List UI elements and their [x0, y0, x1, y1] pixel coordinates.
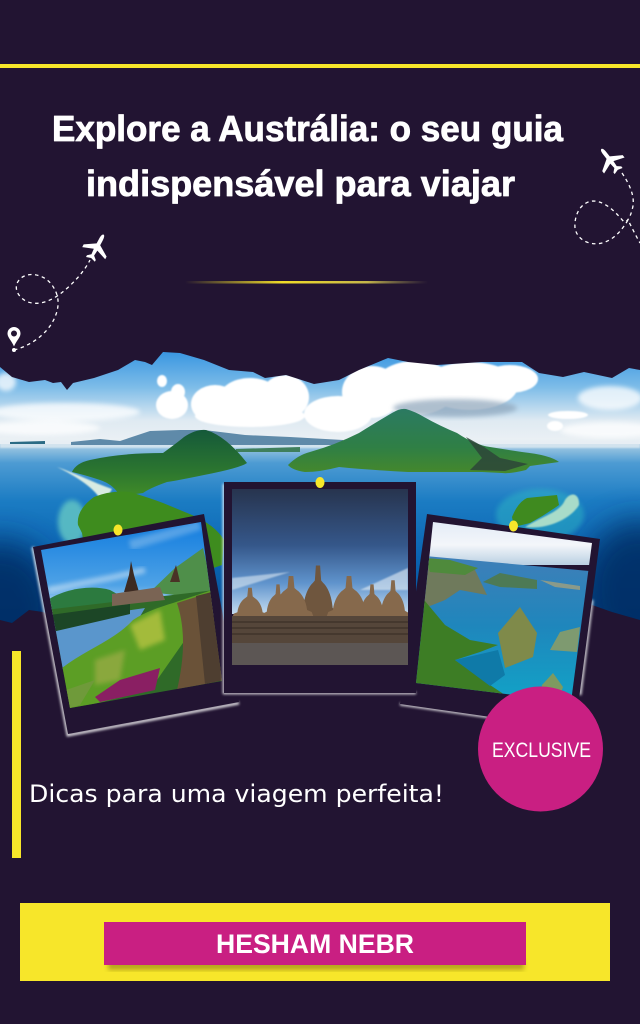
yellow box: [20, 903, 610, 981]
small gold divider: [185, 281, 428, 284]
torn dark edge top: [0, 340, 640, 390]
author banner: [20, 903, 610, 981]
left island: [72, 430, 247, 494]
frame: [33, 514, 239, 734]
frame: [400, 514, 600, 729]
badge: exclusive: EXCLUSIVE: [492, 739, 591, 762]
frame glow: [224, 484, 416, 693]
ground: [232, 643, 408, 665]
flowers: [95, 668, 160, 702]
author name: HESHAM NEBR: [216, 929, 414, 959]
left cliff: [415, 595, 505, 695]
clouds: [156, 361, 588, 432]
flight path left with plane and pin: [8, 229, 115, 352]
title: indispensável para viajar: [86, 163, 515, 204]
title: [52, 108, 564, 204]
polaroid right: [400, 514, 600, 729]
frame glow: [400, 600, 592, 717]
sky: [0, 352, 640, 444]
distant mountains: [71, 430, 343, 445]
bank plants: [62, 590, 212, 710]
stupas: [232, 566, 410, 618]
lagoon: [455, 650, 505, 686]
lower rock: [542, 673, 563, 690]
magenta bar: [104, 922, 526, 965]
flight path right with plane: [575, 141, 640, 244]
frame: [224, 482, 416, 693]
dark water corners: [0, 522, 50, 623]
polaroid centre: [224, 477, 416, 693]
icon: location pin: [8, 327, 20, 346]
subtitle: Dicas para uma viagem perfeita!: [29, 780, 444, 808]
pin: [509, 520, 518, 532]
pin: [316, 477, 324, 488]
islets: [483, 573, 537, 589]
pin: [114, 524, 122, 536]
photo: [416, 522, 592, 695]
small right island: [496, 489, 584, 541]
lower dark background with torn edge: [0, 605, 640, 1024]
sea: [0, 444, 640, 634]
path: [177, 592, 224, 690]
wisps: [0, 373, 640, 438]
bar shadow: [108, 960, 524, 970]
title: Explore a Austrália: o seu guia: [52, 108, 564, 149]
badge: exclusive: [478, 686, 603, 812]
sand spit: [58, 467, 113, 496]
lower left island: [78, 492, 224, 568]
right rock: [550, 627, 580, 652]
turquoise shallows left: [58, 500, 86, 544]
polaroid left: [30, 514, 239, 735]
left yellow bar: [12, 651, 21, 858]
right volcano island: [288, 409, 559, 473]
centre rock: [498, 607, 537, 668]
icon: plane right: [591, 141, 629, 179]
photo: [41, 522, 222, 708]
photo: [232, 489, 410, 665]
water: [50, 608, 145, 670]
icon: plane left: [79, 229, 115, 265]
headland: [420, 558, 487, 610]
frame glow: [33, 547, 239, 735]
landscape photo: [0, 352, 640, 623]
horizon haze: [0, 444, 640, 449]
cloud shadow: [393, 399, 517, 417]
wall: [232, 616, 408, 643]
pagoda: [124, 561, 139, 592]
top yellow rule: [0, 64, 640, 68]
